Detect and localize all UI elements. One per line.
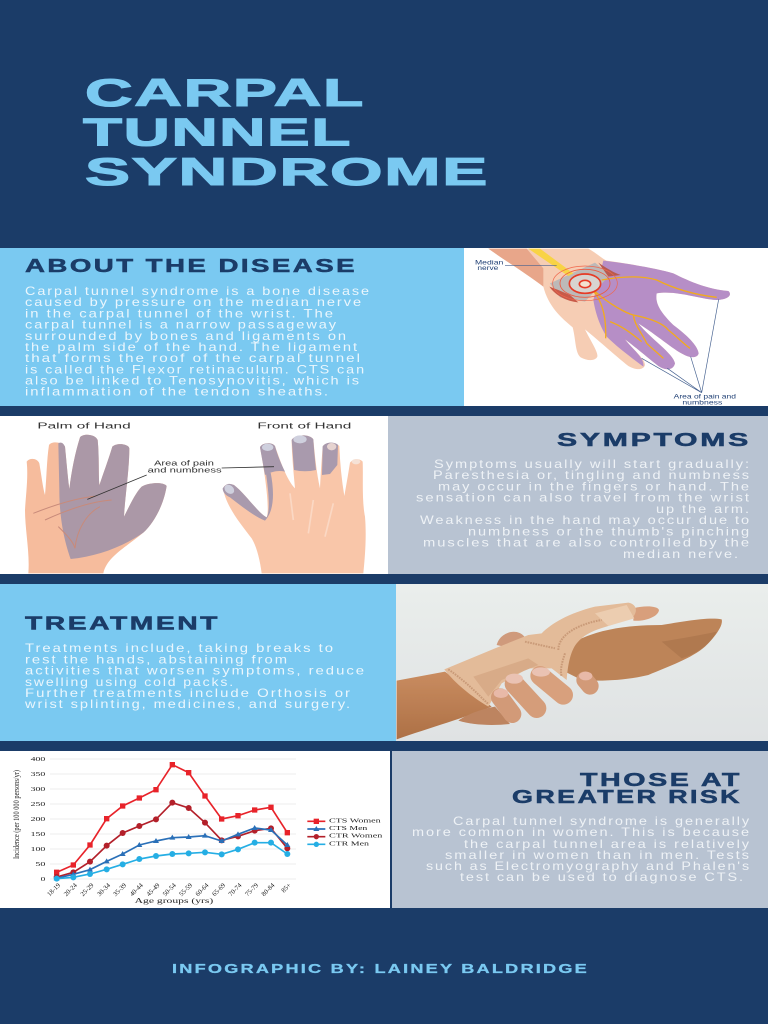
x axis labels: 55-59 [178, 882, 195, 898]
panel: wrist splint photo [396, 584, 768, 741]
labels: palm and front of hand: Palm of Hand [37, 421, 131, 431]
text block: treatment [24, 641, 366, 711]
text block: treatment: rest the hands, abstaining from [25, 652, 289, 666]
series: CTR women [54, 800, 290, 880]
y axis title: Incidence (per 100 000 persons/yr) [12, 770, 21, 859]
label: area of pain [674, 394, 736, 406]
text block: those at greater risk: the carpal tunnel area is relatively [464, 837, 751, 851]
text block: those at greater risk: test can be used to diagnose CTS. [460, 870, 745, 884]
x axis labels: 40-44 [129, 882, 145, 898]
y axis labels: 150 [31, 831, 46, 838]
y axis labels: 0 [41, 876, 46, 883]
y axis labels: 200 [31, 816, 46, 823]
x axis labels: 35-39 [112, 882, 129, 898]
title: CARPAL [85, 72, 365, 115]
text block: symptoms [416, 457, 751, 561]
chart legend: CTS Women [329, 817, 382, 824]
text block: about the disease [25, 284, 371, 398]
icon: palm of hand [25, 435, 167, 573]
x axis labels: 75-79 [244, 882, 261, 898]
heading: those at greater risk [512, 770, 742, 807]
text block: about the disease: that forms the roof of the carpal tunnel [25, 351, 362, 365]
panel: symptoms [388, 416, 768, 574]
y axis labels: 250 [31, 801, 46, 808]
text block: those at greater risk: more common in women. This is because [412, 825, 751, 839]
x axis labels: 70-74 [227, 882, 244, 898]
title: TUNNEL [83, 112, 352, 154]
panel: median nerve hand illustration [464, 248, 768, 406]
x axis labels: 65-69 [211, 882, 228, 898]
text block: symptoms: up the arm. [656, 502, 751, 516]
text block: those at greater risk: such as Electromyography and Phalen's [426, 859, 751, 873]
text block: about the disease: Carpal tunnel syndrome is a bone disease [25, 284, 371, 298]
text block: about the disease: in the carpal tunnel of the wrist. The [25, 306, 335, 320]
labels: palm and front of hand: and numbness [148, 468, 222, 475]
panel: those at greater risk [392, 751, 768, 908]
text block: treatment: Treatments include, taking breaks to [25, 641, 335, 655]
label: median nerve: nerve [477, 266, 499, 272]
footer credit: INFOGRAPHIC BY: LAINEY BALDRIDGE [172, 961, 589, 976]
chart legend: CTS Men [329, 825, 368, 832]
text block: those at greater risk [412, 814, 751, 884]
text block: about the disease: caused by pressure on the median nerve [25, 295, 363, 309]
x axis labels: 18-19 [46, 882, 63, 898]
heading: treatment: TREATMENT [25, 614, 220, 634]
text block: treatment: wrist splinting, medicines, and surgery. [24, 697, 352, 711]
label: area of pain: Area of pain and [674, 394, 736, 400]
labels: palm and front of hand [37, 421, 352, 499]
x axis labels: 30-34 [96, 882, 113, 898]
y axis labels: 50 [35, 861, 46, 868]
text block: those at greater risk: Carpal tunnel syndrome is generally [453, 814, 751, 828]
text block: about the disease: carpal tunnel is a narrow passageway [25, 318, 338, 332]
heading: about the disease: ABOUT THE DISEASE [25, 256, 357, 276]
text block: symptoms: numbness or the thumb's pinching [468, 524, 751, 538]
x axis title: Age groups (yrs) [135, 896, 214, 905]
x axis labels: 85+ [280, 882, 293, 894]
title [83, 72, 489, 194]
icon: hand wearing wrist splint [397, 603, 722, 739]
heading: those at greater risk: THOSE AT [580, 770, 742, 790]
y axis labels: 100 [31, 846, 46, 853]
x axis labels: 80-84 [260, 882, 277, 898]
text block: treatment: activities that worsen symptoms, reduce [25, 664, 366, 678]
text block: treatment: swelling using cold packs. [25, 675, 235, 689]
text block: about the disease: inflammation of the tendon sheaths. [25, 384, 330, 398]
y axis labels: 350 [31, 771, 46, 778]
text block: symptoms: median nerve. [623, 547, 740, 561]
label: median nerve [475, 260, 503, 272]
text block: about the disease: the palm side of the hand. The ligament [25, 340, 359, 354]
title: SYNDROME [85, 151, 489, 194]
panel: palm and front of hand illustration [0, 416, 388, 574]
text block: about the disease: is called the Flexor retinaculum. CTS can [25, 362, 366, 376]
panel: about the disease [0, 248, 464, 406]
chart legend: CTR Women [329, 833, 383, 840]
y axis labels: 400 [31, 756, 46, 763]
text block: about the disease: surrounded by bones and ligaments on [25, 329, 348, 343]
chart legend: CTR Men [329, 840, 370, 847]
text block: treatment: Further treatments include Orthosis or [25, 686, 352, 700]
x axis labels [46, 882, 293, 898]
text block: symptoms: muscles that are also controlled by the [423, 536, 751, 550]
text block: symptoms: Paresthesia or, tingling and numbness [433, 468, 751, 482]
text block: those at greater risk: smaller in women than in men. Tests [445, 848, 751, 862]
text block: symptoms: Weakness in the hand may occur due to [420, 513, 751, 527]
label: area of pain: numbness [682, 400, 722, 406]
text block: about the disease: also be linked to Tenosynovitis, which is [25, 374, 361, 388]
heading: symptoms: SYMPTOMS [557, 430, 751, 450]
x axis labels: 20-24 [63, 882, 79, 898]
chart grid [50, 759, 296, 879]
series: CTS men [54, 825, 290, 880]
heading: those at greater risk: GREATER RISK [512, 787, 742, 807]
series: CTR men [54, 840, 290, 882]
text block: symptoms: sensation can also travel from the wrist [416, 490, 751, 504]
label: median nerve: Median [475, 260, 503, 266]
y axis labels: 300 [31, 786, 46, 793]
icon: hand with median nerve [488, 249, 730, 393]
x axis labels: 25-29 [79, 882, 96, 898]
icon: front of hand [223, 435, 366, 573]
text block: symptoms: may occur in the fingers or hand. The [438, 480, 751, 494]
chart legend [307, 817, 383, 847]
x axis labels: 50-54 [162, 882, 178, 898]
panel: incidence line chart [0, 751, 390, 908]
labels: palm and front of hand: Front of Hand [257, 421, 352, 431]
panel: treatment [0, 584, 396, 741]
text block: symptoms: Symptoms usually will start gradually: [434, 457, 751, 471]
x axis labels: 60-64 [194, 882, 211, 898]
x axis labels: 45-49 [145, 882, 162, 898]
labels: palm and front of hand: Area of pain [154, 460, 214, 467]
series: CTS women [54, 762, 290, 875]
y axis labels [31, 756, 46, 883]
